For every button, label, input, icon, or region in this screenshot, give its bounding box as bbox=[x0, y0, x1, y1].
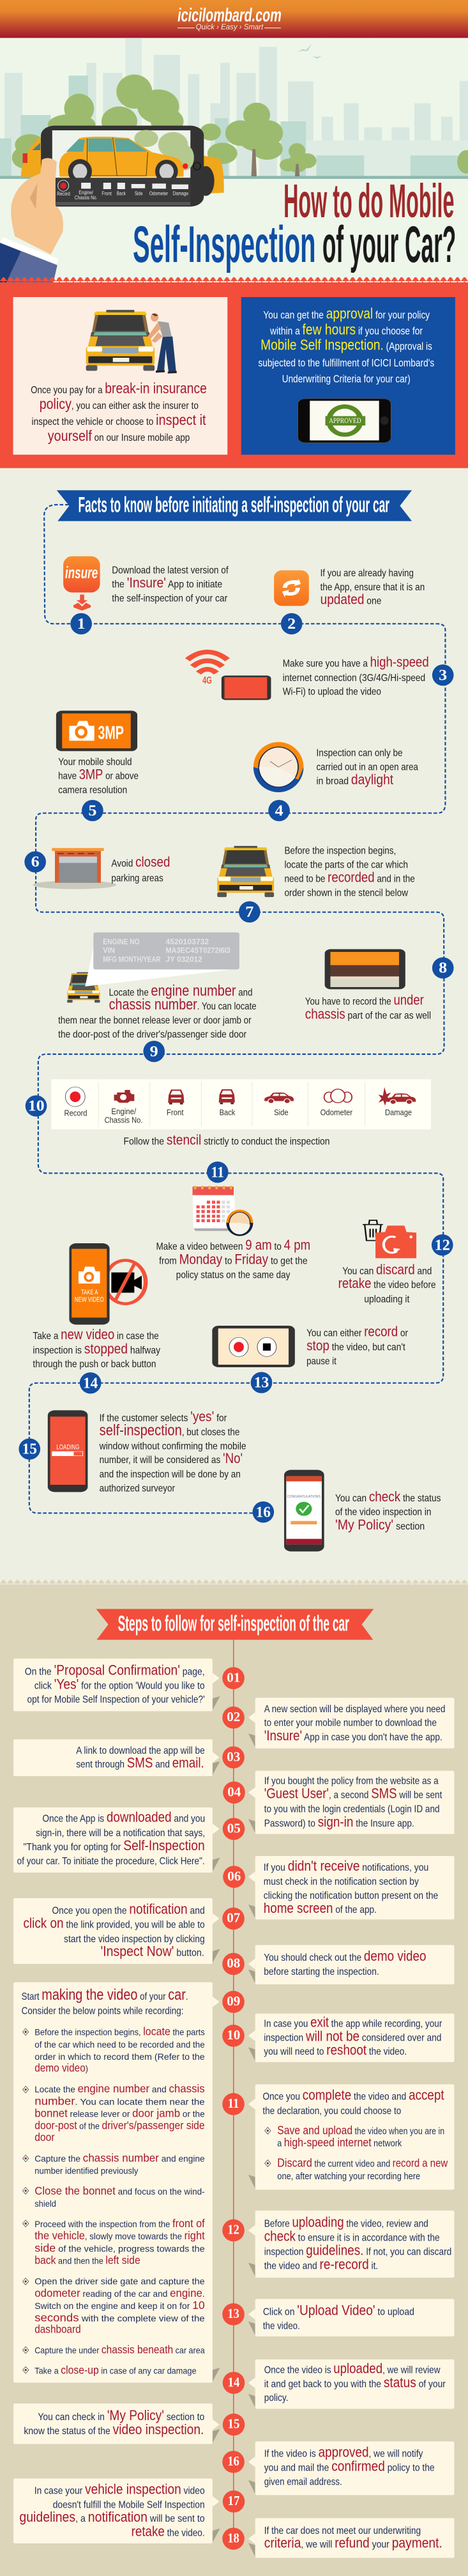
text: fact 6: Avoid closed bbox=[111, 854, 170, 870]
text: fact 7: need to be recorded and in the bbox=[285, 870, 415, 885]
marker 4: 4 bbox=[275, 802, 283, 819]
stencil bar labels: Chassis No. bbox=[75, 195, 97, 201]
text: fact 11: policy status on the same day bbox=[176, 1269, 291, 1281]
card 01: click 'Yes' for the option 'Would you like to bbox=[34, 1676, 205, 1692]
stencil item: odometer bbox=[321, 1089, 352, 1117]
card 09: Close the bonnet and focus on the wind- bbox=[34, 2185, 205, 2197]
step number markers bbox=[222, 1667, 245, 2550]
icon: number plate callout: VIN bbox=[103, 947, 115, 955]
facts 6 to 9 bbox=[33, 845, 431, 1040]
text: fact 9: the door-post of the driver's/passenger side door bbox=[58, 1029, 246, 1040]
card 08: You should check out the demo video bbox=[264, 1948, 426, 1964]
steps section background bbox=[0, 1580, 468, 2576]
step 05: 05 bbox=[227, 1821, 241, 1836]
marker 5: 5 bbox=[88, 802, 96, 819]
stencil item: engine bbox=[105, 1090, 142, 1125]
text: fact 1: the self-inspection of your car bbox=[112, 593, 228, 604]
stencil item: side bbox=[264, 1092, 294, 1117]
marker 6: 6 bbox=[31, 854, 40, 870]
card 16: given email address. bbox=[264, 2476, 342, 2487]
card 09: Before the inspection begins, locate the parts bbox=[34, 2026, 205, 2038]
card 07: start the video inspection by clicking bbox=[64, 1933, 205, 1945]
icon: phone congratulations: CONGRATULATIONS bbox=[287, 1495, 321, 1499]
text: fact 13: You can either record or bbox=[306, 1324, 408, 1340]
step 11 bbox=[222, 2093, 245, 2115]
stencil bar labels bbox=[57, 180, 188, 201]
text: fact 3: Make sure you have a high-speed bbox=[283, 654, 429, 670]
step 15: 15 bbox=[228, 2417, 239, 2432]
step 12 bbox=[222, 2220, 245, 2241]
icon: phone loading: LOADING bbox=[56, 1443, 79, 1451]
marker 8 bbox=[432, 957, 454, 979]
stencil bar labels: Odometer bbox=[149, 190, 168, 197]
card 15: You can check in 'My Policy' section to bbox=[38, 2407, 204, 2423]
card 08 bbox=[248, 1945, 454, 1984]
marker 7: 7 bbox=[245, 903, 253, 921]
card 02 bbox=[248, 1698, 454, 1749]
icon: insure app bbox=[63, 556, 100, 611]
marker 9 bbox=[143, 1041, 165, 1062]
text: fact 15: number, it will be considered as 'No' bbox=[100, 1450, 243, 1466]
text: fact 9: chassis number. You can locate bbox=[109, 996, 257, 1013]
text: fact 2: updated one bbox=[321, 592, 381, 607]
step 02: 02 bbox=[227, 1710, 240, 1724]
text: approval: Mobile Self Inspection. (Approval is bbox=[260, 337, 432, 353]
text: fact 9 bbox=[58, 983, 257, 1040]
facts 1 to 5 bbox=[56, 556, 429, 796]
heading ribbon: steps bbox=[96, 1609, 374, 1640]
step 17: 17 bbox=[228, 2494, 239, 2508]
text: fact 8 bbox=[305, 992, 431, 1022]
stencil item: damage bbox=[379, 1087, 416, 1117]
marker 2 bbox=[281, 613, 303, 634]
card 04 bbox=[248, 1771, 454, 1834]
text: fact 1: the 'Insure' App to initiate bbox=[112, 575, 222, 590]
card 09: order in which to record them (Refer to the bbox=[34, 2052, 205, 2062]
text: break-in insurance policy: inspect the vehicle or choose to inspect it bbox=[32, 411, 206, 429]
text: fact 14: through the push or back button bbox=[33, 1358, 156, 1370]
text: fact 11: Make a video between 9 am to 4 pm bbox=[156, 1237, 310, 1253]
card 03: A link to download the app will be bbox=[76, 1745, 205, 1756]
card 09: Locate the engine number and chassis bbox=[34, 2083, 205, 2095]
step cards bbox=[13, 1659, 454, 2558]
text: approval bbox=[258, 305, 434, 385]
marker 12 bbox=[432, 1234, 453, 1255]
card 12 bbox=[248, 2211, 454, 2278]
text: fact 13 bbox=[306, 1324, 408, 1367]
icon: phone with approved stamp: APPROVED bbox=[329, 417, 361, 425]
text: break-in insurance policy: yourself on our Insure mobile app bbox=[48, 427, 190, 445]
text: fact 11: from Monday to Friday to get the bbox=[159, 1252, 307, 1267]
card 18: criteria, we will refund your payment. bbox=[264, 2535, 442, 2551]
icon: phone under chassis bbox=[325, 949, 405, 989]
text: fact 9: Locate the engine number and bbox=[109, 983, 252, 999]
text: fact 15: and the inspection will be done by an bbox=[100, 1468, 241, 1480]
card 04: Password) to sign-in the Insure app. bbox=[264, 1814, 414, 1830]
card 07: 'Inspect Now' button. bbox=[101, 1943, 204, 1959]
stencil bar labels: Front bbox=[102, 190, 112, 197]
text: fact 10: Follow the stencil strictly to conduct the inspection bbox=[124, 1132, 330, 1148]
step 10 bbox=[222, 2025, 245, 2047]
step 16: 16 bbox=[227, 2455, 239, 2469]
card 09: Switch on the engine and keep it on for 10 bbox=[34, 2299, 205, 2312]
text: fact 15: If the customer selects 'yes' for bbox=[100, 1409, 227, 1424]
card 13: the video. bbox=[263, 2320, 300, 2331]
marker 10 bbox=[26, 1095, 47, 1117]
card 09: back and then the left side bbox=[34, 2255, 140, 2266]
step 06: 06 bbox=[227, 1869, 241, 1883]
icon: man inspecting car bbox=[86, 310, 177, 374]
card 09: Open the driver side gate and capture the bbox=[34, 2276, 205, 2287]
stencil bar labels: Engine/ bbox=[79, 190, 93, 195]
marker 7 bbox=[239, 901, 260, 923]
icon: closed garage bbox=[33, 848, 116, 889]
marker 10: 10 bbox=[28, 1098, 45, 1114]
step 03 bbox=[222, 1746, 245, 1768]
card 05 bbox=[13, 1807, 220, 1873]
text: fact 7: Before the inspection begins, bbox=[285, 845, 396, 857]
step 09: 09 bbox=[227, 1995, 240, 2009]
text: fact 16 bbox=[335, 1489, 441, 1533]
icon: 4G wifi with tablet bbox=[188, 652, 271, 700]
stencil bar labels: Record bbox=[57, 191, 70, 197]
tagline: Quick › Easy › Smart bbox=[196, 23, 264, 31]
step 10: 10 bbox=[227, 2028, 240, 2043]
card 16: If the video is approved, we will notify bbox=[264, 2444, 423, 2460]
card 15: know the status of the video inspection. bbox=[24, 2421, 204, 2437]
icon: phone take new video: TAKE A bbox=[81, 1288, 98, 1296]
marker 14 bbox=[80, 1372, 101, 1393]
icon: phone congratulations bbox=[284, 1470, 324, 1551]
icon: number plate callout: MFG MONTH/YEAR bbox=[103, 955, 161, 964]
marker 13 bbox=[251, 1372, 272, 1393]
marker 15: 15 bbox=[22, 1441, 37, 1457]
card 09: seconds with the complete view of the bbox=[34, 2312, 205, 2324]
marker 1: 1 bbox=[77, 615, 86, 632]
text: fact 15: self-inspection, but closes the bbox=[100, 1422, 239, 1439]
card 09: bonnet release lever or door jamb or the bbox=[34, 2108, 205, 2119]
step 15 bbox=[223, 2414, 245, 2435]
text: fact 14: inspection is stopped halfway bbox=[33, 1341, 160, 1356]
card 05: "Thank you for opting for Self-Inspection bbox=[23, 1837, 205, 1853]
text: fact 4 bbox=[317, 747, 418, 787]
panel: break-in insurance bbox=[13, 297, 227, 455]
text: fact 1: Download the latest version of bbox=[112, 564, 229, 576]
card 09: door-post of the driver's/passenger side bbox=[34, 2120, 205, 2131]
icon: number plate callout: JY 032012 bbox=[165, 955, 202, 964]
card 14 bbox=[248, 2359, 454, 2409]
card 09: Capture the chassis number and engine bbox=[34, 2152, 205, 2165]
stencil bar labels: Back bbox=[117, 190, 126, 197]
step 04 bbox=[223, 1781, 245, 1804]
step 01 bbox=[222, 1667, 245, 1689]
step 18 bbox=[222, 2527, 245, 2550]
marker 11: 11 bbox=[211, 1164, 224, 1181]
card 05: sign-in, there will be a notification that says, bbox=[36, 1827, 205, 1839]
card 14: it and get back to you with the status of your bbox=[264, 2375, 446, 2390]
header banner bbox=[0, 0, 468, 38]
icon: 3MP tablet: 3MP bbox=[98, 723, 124, 743]
text: fact 12 bbox=[338, 1262, 436, 1305]
card 06: home screen of the app. bbox=[264, 1900, 377, 1916]
card 09: door bbox=[34, 2131, 55, 2143]
text: break-in insurance policy: Once you pay for a break-in insurance bbox=[31, 380, 207, 397]
text: fact 4: in broad daylight bbox=[317, 772, 394, 787]
step 08: 08 bbox=[227, 1956, 240, 1971]
text: fact 3 bbox=[283, 654, 429, 698]
step 01: 01 bbox=[227, 1671, 240, 1685]
card 09: Capture the under chassis beneath car area bbox=[34, 2344, 205, 2356]
icon: phone take new video bbox=[69, 1243, 146, 1324]
icon: calendar and clock bbox=[193, 1186, 253, 1236]
text: fact 5 bbox=[58, 756, 139, 796]
marker 4 bbox=[268, 800, 290, 821]
marker 3: 3 bbox=[439, 667, 447, 684]
card 01: On the 'Proposal Confirmation' page, bbox=[25, 1662, 205, 1678]
step 16 bbox=[222, 2451, 245, 2473]
stencil item: back: Back bbox=[220, 1108, 236, 1117]
card 09 bbox=[13, 1982, 220, 2382]
text: fact 4: Inspection can only be bbox=[317, 747, 403, 758]
text: approval: within a few hours if you choose for bbox=[269, 321, 423, 338]
stencil item: odometer: Odometer bbox=[321, 1108, 352, 1117]
marker 1 bbox=[70, 613, 92, 634]
card 09: Take a close-up in case of any car damage bbox=[34, 2365, 197, 2376]
step 11: 11 bbox=[228, 2097, 239, 2111]
card 10 bbox=[248, 2014, 454, 2062]
step 07 bbox=[222, 1908, 245, 1929]
text: fact 7 bbox=[285, 845, 415, 899]
hero scene background bbox=[0, 38, 468, 281]
marker 3 bbox=[432, 664, 454, 686]
card 17: In case your vehicle inspection video bbox=[34, 2481, 205, 2497]
icon: phone loading bbox=[48, 1410, 87, 1492]
step 14 bbox=[223, 2372, 245, 2394]
icon: number plate callout bbox=[67, 932, 239, 1002]
stencil bar labels: Side bbox=[135, 190, 143, 197]
text: fact 16: 'My Policy' section bbox=[335, 1517, 425, 1533]
panel: stencil bbox=[51, 1079, 431, 1130]
text: fact 9: them near the bonnet release lever or door jamb or bbox=[58, 1015, 252, 1026]
facts 13 to 16 bbox=[33, 1324, 441, 1551]
step 12: 12 bbox=[227, 2223, 239, 2237]
text: fact 14 bbox=[33, 1326, 160, 1370]
step 18: 18 bbox=[227, 2531, 239, 2545]
stencil item: front bbox=[167, 1089, 184, 1117]
card 16: you and mail the confirmed policy to the bbox=[264, 2458, 435, 2474]
card 05: Once the App is downloaded and you bbox=[42, 1809, 205, 1825]
card 17: guidelines, a notification will be sent to bbox=[19, 2509, 205, 2525]
card 06: If you didn't receive notifications, you bbox=[264, 1858, 428, 1874]
marker 13: 13 bbox=[254, 1374, 269, 1391]
card 09: number. You can locate them near the bbox=[34, 2096, 205, 2107]
facts 1 to 5: insure bbox=[65, 563, 98, 582]
card 11 bbox=[248, 2084, 454, 2189]
icon: trash and camera bbox=[363, 1220, 416, 1258]
text: fact 5: camera resolution bbox=[58, 785, 127, 796]
step 09 bbox=[222, 1991, 245, 2013]
heading ribbon: facts bbox=[57, 490, 412, 521]
stencil item: front: Front bbox=[167, 1108, 184, 1117]
card 09: Proceed with the inspection from the front of bbox=[34, 2218, 205, 2230]
text: fact 12: You can discard and bbox=[342, 1262, 432, 1277]
step 14: 14 bbox=[228, 2375, 240, 2389]
icon: number plate callout: MA3EC4ST0272I6I3 bbox=[165, 947, 230, 955]
panel: approval bbox=[241, 297, 455, 455]
facts 10 to 12 bbox=[51, 1079, 436, 1324]
icon: phone record and stop bbox=[212, 1326, 295, 1367]
card 09: demo video) bbox=[34, 2062, 88, 2074]
marker 8: 8 bbox=[439, 960, 447, 976]
text: fact 1 bbox=[112, 564, 229, 604]
text: fact 5: Your mobile should bbox=[58, 756, 132, 767]
card 11: a high-speed internet network bbox=[277, 2135, 402, 2149]
step 13: 13 bbox=[227, 2307, 239, 2321]
marker 11 bbox=[207, 1162, 229, 1183]
marker 16: 16 bbox=[256, 1504, 271, 1521]
card 17: retake the video. bbox=[132, 2524, 205, 2539]
card 09: of the car which need to be recorded and the bbox=[34, 2040, 205, 2050]
marker 6 bbox=[24, 851, 46, 873]
step 17 bbox=[223, 2490, 245, 2513]
icon: number plate callout: ENGINE NO bbox=[103, 938, 140, 946]
icon: 4G wifi with tablet: 4G bbox=[202, 675, 212, 686]
stencil item: record bbox=[64, 1087, 87, 1118]
dotted path with numbered markers bbox=[19, 505, 454, 1522]
step 03: 03 bbox=[227, 1750, 240, 1764]
card 17: doesn't fulfill the Mobile Self Inspection bbox=[53, 2499, 205, 2510]
marker 15 bbox=[19, 1438, 40, 1460]
card 09: Consider the below points while recording: bbox=[22, 2005, 183, 2016]
marker 12: 12 bbox=[435, 1237, 450, 1254]
icon: update sync bbox=[274, 571, 309, 606]
card 05: of your car. To initiate the procedure, Click Here". bbox=[17, 1855, 205, 1867]
card 03: sent through SMS and email. bbox=[76, 1755, 204, 1771]
text: fact 13: pause it bbox=[306, 1356, 336, 1367]
card 09: side of the vehicle, progress towards the bbox=[34, 2242, 205, 2254]
card 09: odometer reading of the car and engine. bbox=[34, 2287, 205, 2299]
stencil item: record: Record bbox=[64, 1109, 87, 1118]
stencil item: side: Side bbox=[274, 1108, 289, 1117]
text: break-in insurance policy: policy, you can either ask the insurer to bbox=[40, 395, 199, 413]
text: approval: You can get the approval for your policy bbox=[263, 305, 430, 322]
card 09: Start making the video of your car. bbox=[22, 1986, 188, 2004]
card 09: number identified previously bbox=[34, 2166, 139, 2176]
marker 9: 9 bbox=[150, 1043, 158, 1060]
icon: car with bonnet open bbox=[217, 846, 274, 897]
card 03 bbox=[13, 1739, 220, 1776]
text: fact 2 bbox=[321, 567, 425, 607]
card 06 bbox=[248, 1856, 454, 1919]
text: fact 15: window without confirming the mobile bbox=[99, 1440, 246, 1452]
stencil item: back bbox=[219, 1089, 236, 1117]
icon: clock bbox=[253, 742, 303, 792]
icon: phone with approved stamp bbox=[298, 399, 391, 443]
card 09: shield bbox=[34, 2199, 56, 2209]
card 17 bbox=[13, 2478, 220, 2543]
text: fact 15 bbox=[99, 1409, 246, 1494]
stencil bar labels: Damage bbox=[173, 190, 188, 197]
card 15 bbox=[13, 2404, 220, 2444]
marker 2: 2 bbox=[287, 615, 296, 632]
marker 16 bbox=[252, 1501, 274, 1522]
card 13 bbox=[248, 2299, 454, 2336]
text: fact 12: uploading it bbox=[364, 1293, 410, 1305]
card 16 bbox=[248, 2441, 454, 2495]
title bbox=[133, 174, 456, 273]
icon: hand and suit sleeve bbox=[0, 158, 63, 283]
text: fact 3: Wi-Fi) to upload the video bbox=[283, 686, 381, 698]
stencil item: engine: Chassis No. bbox=[105, 1116, 142, 1125]
step 13 bbox=[222, 2303, 245, 2326]
section: intro cards bbox=[13, 297, 455, 521]
stencil item: damage: Damage bbox=[385, 1108, 412, 1117]
marker 14: 14 bbox=[83, 1375, 98, 1392]
step 02 bbox=[222, 1706, 245, 1729]
text: fact 11 bbox=[156, 1237, 310, 1281]
card 07: click on the link provided, you will be able to bbox=[23, 1915, 205, 1931]
icon: number plate callout: 4520103732 bbox=[165, 938, 209, 946]
text: fact 6: parking areas bbox=[111, 872, 163, 884]
step 05 bbox=[223, 1818, 245, 1840]
text: fact 8: You have to record the under bbox=[305, 992, 424, 1008]
card 07 bbox=[13, 1898, 220, 1964]
card 08: before starting the inspection. bbox=[264, 1966, 379, 1977]
step 04: 04 bbox=[227, 1785, 241, 1799]
card 12: the video and re-record it. bbox=[264, 2257, 378, 2272]
card 10: you will need to reshoot the video. bbox=[264, 2042, 407, 2058]
text: fact 13: stop the video, but can't bbox=[306, 1338, 405, 1353]
step 08 bbox=[222, 1953, 245, 1975]
text: fact 14: Take a new video in case the bbox=[33, 1326, 159, 1342]
stencil item: engine: Engine/ bbox=[111, 1107, 137, 1116]
card 13: Click on 'Upload Video' to upload bbox=[263, 2303, 414, 2318]
step 07: 07 bbox=[227, 1911, 240, 1926]
step 06 bbox=[223, 1866, 245, 1888]
marker 5 bbox=[82, 800, 103, 821]
text: fact 15: authorized surveyor bbox=[100, 1482, 175, 1494]
text: fact 16: You can check the status bbox=[335, 1489, 441, 1505]
card 07: Once you open the notification and bbox=[52, 1901, 205, 1917]
text: break-in insurance policy bbox=[31, 380, 207, 445]
card 11: Once you complete the video and accept bbox=[262, 2087, 444, 2103]
card 18 bbox=[248, 2518, 454, 2558]
red panel background bbox=[0, 277, 468, 468]
text: fact 6 bbox=[111, 854, 170, 884]
card 04: 'Guest User', a second SMS will be sent bbox=[264, 1786, 442, 1801]
card 01 bbox=[13, 1659, 220, 1711]
header banner: icicilombard.com bbox=[177, 4, 282, 26]
card 14: policy. bbox=[264, 2392, 289, 2404]
icon: phone take new video: NEW VIDEO bbox=[75, 1296, 104, 1303]
icon: 3MP tablet bbox=[56, 710, 137, 751]
card 01: opt for Mobile Self Inspection of your vehicle?' bbox=[27, 1694, 205, 1705]
icon: phone photographing car bbox=[41, 126, 204, 206]
card 09: the vehicle, slowly move towards the right bbox=[34, 2230, 205, 2242]
text: fact 5: have 3MP or above bbox=[58, 767, 139, 782]
card 09: dashboard bbox=[34, 2324, 81, 2335]
